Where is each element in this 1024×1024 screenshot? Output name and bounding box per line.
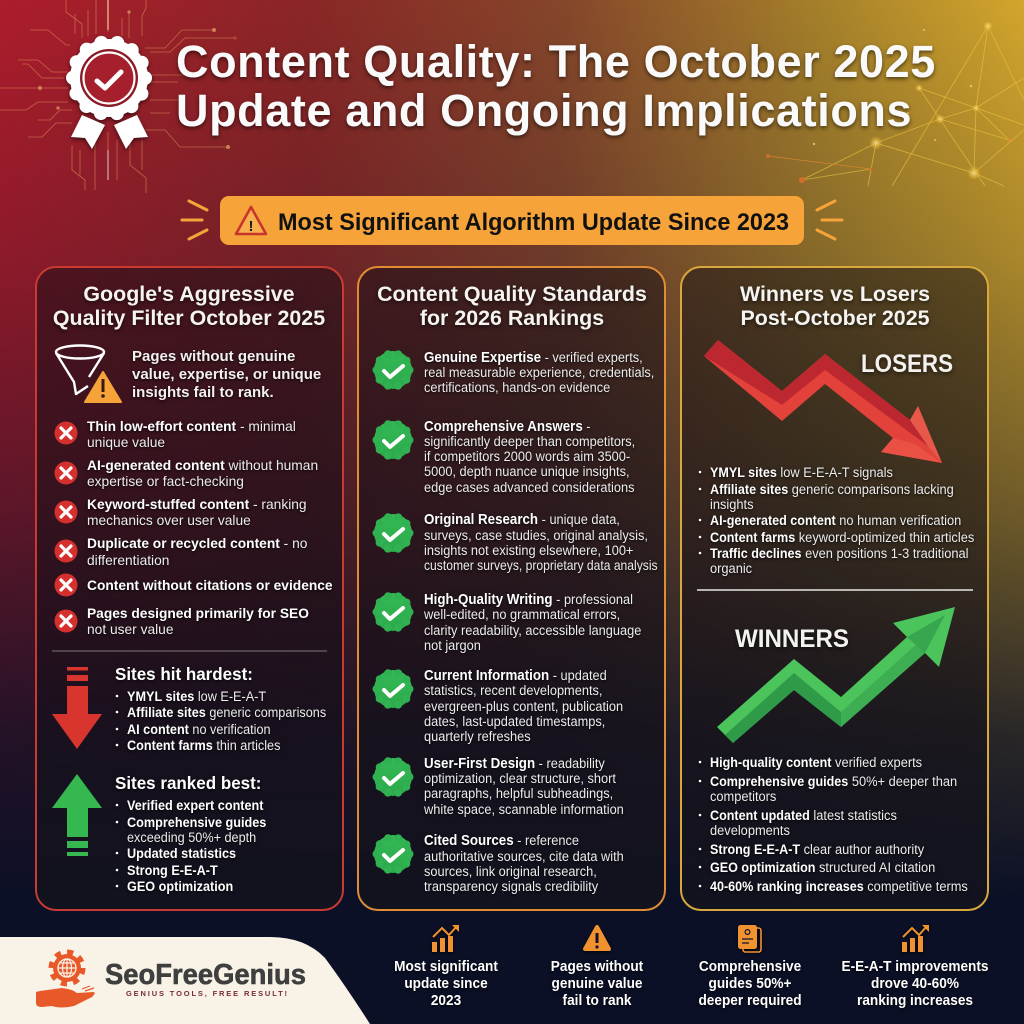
list: winners: Content updated latest statistics bbox=[710, 807, 897, 823]
list: penalised content: not user value bbox=[87, 621, 174, 637]
banner background bbox=[220, 196, 804, 245]
stat: E-E-A-T improvements: E-E-A-T improvements bbox=[841, 958, 989, 975]
network constellation bbox=[766, 21, 1024, 186]
list: quality standards bbox=[423, 348, 658, 894]
sites ranked best: Sites ranked best: bbox=[115, 773, 261, 793]
list: quality standards: paragraphs, helpful subheadings, bbox=[424, 785, 613, 801]
list: quality standards: if competitors 2000 words aim 3500- bbox=[424, 448, 630, 464]
sites ranked best: Updated statistics bbox=[127, 845, 236, 861]
stat: pages without genuine value: genuine value bbox=[552, 975, 643, 992]
icon: gear with globe bbox=[52, 952, 82, 984]
icon: document bbox=[738, 925, 761, 952]
divider bbox=[52, 650, 327, 652]
list: quality standards: significantly deeper than competitors, bbox=[424, 433, 635, 449]
list: winners: developments bbox=[710, 822, 790, 838]
list: losers: Traffic declines even positions 1-3 traditional bbox=[710, 545, 969, 561]
stat: most significant update: update since bbox=[404, 975, 488, 992]
list: penalised content: Thin low-effort content - minimal bbox=[87, 418, 296, 434]
list: quality standards: High-Quality Writing - professional bbox=[424, 590, 633, 607]
list: penalised content: unique value bbox=[87, 434, 165, 450]
circuit traces around the badge bbox=[0, 0, 237, 193]
title: Update and Ongoing Implications bbox=[176, 85, 912, 136]
icons: green check badges bbox=[374, 351, 412, 873]
list: winners: 40-60% ranking increases competitive terms bbox=[710, 878, 968, 894]
losers label: LOSERS bbox=[861, 350, 953, 378]
stat: most significant update bbox=[394, 925, 498, 1009]
panel heading: Google's Aggressive bbox=[83, 282, 295, 306]
list: quality standards: Genuine Expertise - verified experts, bbox=[424, 348, 643, 365]
sites ranked best: Strong E-E-A-T bbox=[127, 862, 218, 878]
stat: E-E-A-T improvements bbox=[841, 925, 989, 1009]
list: quality standards: sources, link original research, bbox=[424, 863, 597, 879]
list: quality standards: customer surveys, proprietary data analysis bbox=[424, 557, 658, 573]
list: winners bbox=[699, 754, 968, 894]
icon: rising bar chart bbox=[432, 925, 459, 952]
panel: Google's aggressive quality filter bbox=[36, 267, 343, 910]
icon: rising bar chart bbox=[902, 925, 929, 952]
list: quality standards: optimization, clear structure, short bbox=[424, 770, 616, 786]
stat: E-E-A-T improvements: drove 40-60% bbox=[871, 975, 959, 992]
sites hit hardest: Content farms thin articles bbox=[127, 737, 281, 753]
panel: winners vs losers bbox=[681, 267, 988, 910]
list: quality standards: edge cases advanced considerations bbox=[424, 479, 635, 495]
list: winners: Comprehensive guides 50%+ deeper than bbox=[710, 773, 957, 789]
panel heading: Post-October 2025 bbox=[740, 306, 930, 330]
icon: award rosette with check bbox=[70, 39, 148, 149]
list: penalised content: Keyword-stuffed content - ranking bbox=[87, 496, 307, 512]
list: losers: Affiliate sites generic comparisons lacking bbox=[710, 481, 954, 497]
stat: comprehensive guides: guides 50%+ bbox=[708, 975, 792, 992]
list: quality standards: white space, scannable information bbox=[423, 801, 624, 817]
winners label: WINNERS bbox=[735, 625, 849, 653]
sites ranked best: GEO optimization bbox=[127, 878, 233, 894]
list: quality standards: surveys, case studies, original analysis, bbox=[424, 527, 648, 543]
icon: warning triangle: ! bbox=[248, 218, 254, 235]
list: winners: High-quality content verified experts bbox=[710, 754, 922, 770]
stat: comprehensive guides: deeper required bbox=[698, 992, 802, 1009]
banner text: Most Significant Algorithm Update Since 2023 bbox=[278, 210, 789, 236]
list: losers: insights bbox=[710, 496, 754, 512]
icon: funnel with warning bbox=[56, 346, 121, 402]
stat: most significant update: 2023 bbox=[431, 992, 461, 1009]
list: winners: competitors bbox=[710, 788, 777, 804]
list: quality standards: statistics, recent developments, bbox=[424, 682, 602, 698]
panel frame bbox=[681, 267, 988, 910]
list: quality standards: transparency signals credibility bbox=[424, 878, 598, 894]
icon: warning triangle bbox=[236, 207, 266, 235]
list: losers: organic bbox=[710, 560, 752, 576]
stat: comprehensive guides bbox=[698, 925, 802, 1009]
list: quality standards: 5000, depth nuance unique insights, bbox=[424, 463, 630, 479]
list: penalised content: expertise or fact-checking bbox=[87, 473, 244, 489]
panel heading: Quality Filter October 2025 bbox=[53, 306, 325, 330]
icons: red cross markers bbox=[54, 422, 78, 632]
sites ranked best: exceeding 50%+ depth bbox=[127, 829, 256, 845]
list: quality standards: certifications, hands-on evidence bbox=[424, 379, 610, 395]
sites hit hardest bbox=[115, 664, 326, 753]
list: losers: YMYL sites low E-E-A-T signals bbox=[710, 464, 893, 480]
divider bbox=[697, 589, 973, 591]
panel heading: Content Quality Standards bbox=[377, 282, 647, 306]
list: winners: Strong E-E-A-T clear author authority bbox=[710, 841, 924, 857]
list: losers: Content farms keyword-optimized thin articles bbox=[710, 529, 975, 545]
list: quality standards: Cited Sources - reference bbox=[424, 831, 579, 848]
list: quality standards: Current Information - updated bbox=[424, 666, 607, 683]
list: penalised content: mechanics over user value bbox=[87, 512, 251, 528]
list: winners: GEO optimization structured AI citation bbox=[710, 859, 935, 875]
brand tagline: GENIUS TOOLS, FREE RESULT! bbox=[126, 989, 287, 998]
sites hit hardest: YMYL sites low E-E-A-T bbox=[127, 688, 266, 704]
list: quality standards: Original Research - unique data, bbox=[424, 510, 620, 527]
filter statement: insights fail to rank. bbox=[132, 384, 274, 401]
title: Content Quality: The October 2025 bbox=[176, 36, 936, 87]
list: quality standards: clarity readability, accessible language bbox=[424, 622, 641, 638]
icon: red zigzag down arrow bbox=[704, 340, 942, 463]
list: quality standards: not jargon bbox=[424, 637, 481, 653]
sites ranked best: Verified expert content bbox=[127, 797, 264, 813]
list: quality standards: evergreen-plus content, publication bbox=[424, 698, 623, 714]
list: penalised content: differentiation bbox=[87, 552, 169, 568]
icon: red down arrow bbox=[52, 667, 102, 749]
stat: E-E-A-T improvements: ranking increases bbox=[857, 992, 973, 1009]
list: penalised content: Content without citations or evidence bbox=[87, 577, 333, 593]
list: quality standards: User-First Design - readability bbox=[424, 754, 605, 771]
list: penalised content: AI-generated content without human bbox=[87, 457, 318, 473]
panel heading bbox=[53, 282, 325, 330]
sites ranked best: Comprehensive guides bbox=[127, 814, 266, 830]
filter statement: Pages without genuine bbox=[132, 348, 295, 365]
list: penalised content: Pages designed primarily for SEO bbox=[87, 605, 309, 621]
list: losers: AI-generated content no human verification bbox=[710, 512, 961, 528]
sites ranked best bbox=[115, 773, 266, 894]
list: penalised content: Duplicate or recycled content - no bbox=[87, 535, 308, 551]
list: losers bbox=[699, 464, 975, 576]
list: penalised content bbox=[87, 418, 333, 637]
list: quality standards: well-edited, no grammatical errors, bbox=[423, 606, 620, 622]
list: quality standards: dates, last-updated timestamps, bbox=[424, 713, 605, 729]
panel: content quality standards bbox=[358, 267, 665, 910]
list: quality standards: authoritative sources, cite data with bbox=[424, 848, 624, 864]
panel frame bbox=[358, 267, 665, 910]
stat: pages without genuine value bbox=[551, 927, 643, 1009]
list: quality standards: quarterly refreshes bbox=[424, 728, 531, 744]
panel heading bbox=[740, 282, 930, 330]
stat: pages without genuine value: fail to rank bbox=[563, 992, 632, 1009]
stat: pages without genuine value: Pages without bbox=[551, 958, 643, 975]
stat: most significant update: Most significant bbox=[394, 958, 498, 975]
title bbox=[176, 36, 936, 136]
sites hit hardest: Sites hit hardest: bbox=[115, 664, 253, 684]
panel heading: Winners vs Losers bbox=[740, 282, 930, 306]
panel frame bbox=[36, 267, 343, 910]
list: quality standards: insights not existing elsewhere, 100+ bbox=[424, 542, 634, 558]
footer logo plate bbox=[0, 937, 370, 1024]
sites hit hardest: AI content no verification bbox=[127, 721, 271, 737]
icon: green zigzag up arrow bbox=[717, 607, 955, 743]
icon: open hand bbox=[36, 986, 95, 1008]
panel heading: for 2026 Rankings bbox=[420, 306, 604, 330]
icon: green up arrow bbox=[52, 774, 102, 856]
banner: most significant update bbox=[220, 196, 804, 245]
panel heading bbox=[377, 282, 647, 330]
sites hit hardest: Affiliate sites generic comparisons bbox=[127, 704, 326, 720]
icon: warning bbox=[585, 927, 609, 949]
banner rays bbox=[182, 201, 842, 239]
filter statement bbox=[132, 348, 321, 401]
stat: comprehensive guides: Comprehensive bbox=[699, 958, 801, 975]
plate shape bbox=[0, 937, 370, 1024]
list: quality standards: real measurable experience, credentials, bbox=[424, 364, 654, 380]
brand name: SeoFreeGenius bbox=[105, 959, 306, 991]
filter statement: value, expertise, or unique bbox=[132, 366, 321, 383]
list: quality standards: Comprehensive Answers - bbox=[424, 417, 591, 434]
